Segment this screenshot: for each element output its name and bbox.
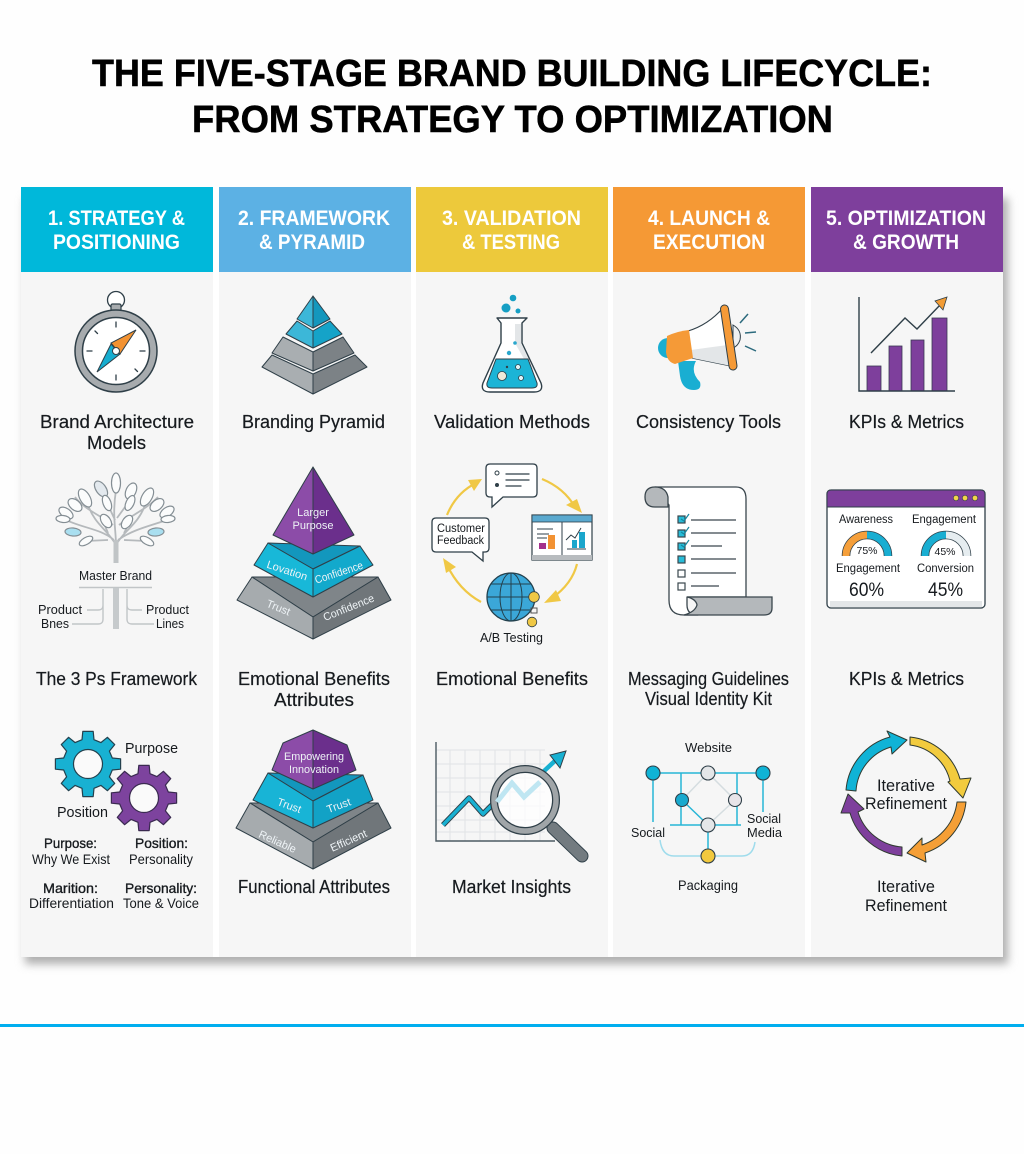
icon: larger purpose pyramid: Confidence — [313, 560, 365, 587]
chart: kpi dashboard: 60% — [849, 580, 884, 601]
icon: brand tree — [38, 473, 189, 631]
icon: gears: Purpose — [125, 741, 178, 757]
header: framework: & PYRAMID — [259, 231, 365, 254]
panel: 3. validation and testing — [416, 187, 608, 957]
icon: brand touchpoint network: Social — [631, 825, 665, 840]
icon: larger purpose pyramid: Purpose — [293, 520, 333, 532]
icon: speech bubble list — [486, 464, 537, 507]
text block: 3 ps definitions: Personality: — [125, 880, 197, 896]
icon: empowering innovation pyramid: Trust — [275, 796, 303, 816]
title — [92, 53, 932, 141]
header: validation: & TESTING — [462, 231, 560, 254]
label: kpis and metrics second: KPIs & Metrics — [849, 669, 964, 689]
icon: growth bar chart — [859, 297, 955, 391]
label: brand architecture models: Models — [87, 433, 146, 453]
header: optimization: & GROWTH — [853, 231, 959, 254]
label: emotional benefits attributes: Emotional Benefits — [238, 669, 390, 689]
icon: brand tree: Bnes — [41, 616, 69, 631]
header: strategy — [21, 187, 213, 272]
icon: guideline scroll — [645, 487, 772, 615]
label: functional attributes: Functional Attributes — [238, 877, 390, 897]
icon: brand tree: Lines — [156, 616, 184, 631]
label: messaging guidelines visual identity kit — [628, 669, 789, 709]
icon: flask — [482, 295, 542, 392]
header: validation — [416, 187, 608, 272]
icon: brand touchpoint network: Website — [685, 740, 732, 755]
icon: brand touchpoint network: Social — [747, 811, 781, 826]
label: a/b testing: A/B Testing — [480, 631, 543, 645]
gauge: engagement — [925, 535, 967, 556]
icon: empowering innovation pyramid: Efficient — [329, 828, 369, 855]
icon: brand tree: Product — [38, 602, 82, 617]
panel: 2. framework and pyramid — [219, 187, 411, 957]
panel: 4. launch and execution — [613, 187, 805, 957]
callout: customer feedback — [432, 518, 489, 561]
label: emotional benefits: Emotional Benefits — [436, 669, 588, 689]
icon: megaphone — [658, 308, 756, 390]
label: market insights: Market Insights — [452, 877, 571, 897]
header: strategy: 1. STRATEGY & — [48, 207, 185, 230]
icon: small branding pyramid — [262, 296, 367, 394]
gauge: awareness — [846, 535, 888, 556]
header: optimization: 5. OPTIMIZATION — [826, 207, 986, 230]
text block: 3 ps definitions: Why We Exist — [32, 851, 110, 867]
header: optimization — [811, 187, 1003, 272]
icon: iterative refinement cycle — [841, 731, 971, 862]
icon: larger purpose pyramid: Lovation — [265, 559, 309, 583]
header: framework — [219, 187, 411, 272]
label: packaging: Packaging — [678, 877, 738, 893]
icon: gears: Position — [57, 805, 108, 821]
label: emotional benefits attributes: Attributes — [274, 690, 354, 710]
icon: brand touchpoint network: Media — [747, 825, 783, 840]
arrows: yellow loop — [443, 479, 582, 603]
icon: compass — [75, 292, 157, 392]
icon: empowering innovation pyramid: Empowering — [284, 751, 344, 763]
header: launch: EXECUTION — [653, 231, 765, 254]
icon: larger purpose pyramid: Larger — [297, 507, 329, 519]
icon: larger purpose pyramid: Trust — [264, 598, 292, 618]
label: branding pyramid: Branding Pyramid — [242, 412, 385, 432]
header: launch: 4. LAUNCH & — [648, 207, 770, 230]
label: messaging guidelines visual identity kit: Visual Identity Kit — [645, 689, 772, 709]
label: iterative refinement — [865, 877, 947, 915]
icon: gears — [55, 731, 178, 831]
text block: 3 ps definitions: Marition: — [43, 880, 98, 896]
chart: kpi dashboard: 45% — [928, 580, 963, 601]
icon: iterative refinement cycle: Iterative — [877, 776, 935, 795]
chart: kpi dashboard: Engagement — [912, 514, 977, 526]
icon: brand tree: Master Brand — [79, 568, 152, 583]
panel: 1. strategy and positioning — [21, 187, 213, 957]
text block: 3 ps definitions: Tone & Voice — [123, 895, 199, 911]
label: emotional benefits attributes — [238, 669, 390, 710]
callout: customer feedback: Customer — [437, 523, 485, 535]
label: brand architecture models — [40, 412, 194, 453]
header: validation: 3. VALIDATION — [442, 207, 581, 230]
text block: 3 ps definitions: Purpose: — [44, 835, 97, 851]
label: kpis and metrics: KPIs & Metrics — [849, 412, 964, 432]
header: framework: 2. FRAMEWORK — [238, 207, 390, 230]
title: FROM STRATEGY TO OPTIMIZATION — [192, 99, 833, 141]
title: THE FIVE-STAGE BRAND BUILDING LIFECYCLE: — [92, 53, 932, 95]
icon: empowering innovation pyramid: Reliable — [257, 829, 298, 856]
icon: brand tree: Product — [146, 602, 189, 617]
header: strategy: POSITIONING — [53, 231, 180, 254]
text block: 3 ps definitions — [29, 835, 199, 911]
icon: analytics window — [532, 515, 592, 560]
chart: kpi dashboard: 75% — [856, 545, 878, 557]
icon: larger purpose pyramid — [237, 467, 391, 639]
header: launch — [613, 187, 805, 272]
icon: larger purpose pyramid: Confidence — [322, 593, 376, 624]
icon: empowering innovation pyramid — [236, 730, 391, 869]
chart: kpi dashboard: Engagement — [836, 563, 901, 575]
label: consistency tools: Consistency Tools — [636, 412, 781, 432]
callout: customer feedback: Feedback — [437, 535, 484, 547]
chart: kpi dashboard: Awareness — [839, 514, 893, 526]
text block: 3 ps definitions: Differentiation — [29, 895, 114, 911]
label: messaging guidelines visual identity kit: Messaging Guidelines — [628, 669, 789, 689]
label: brand architecture models: Brand Architecture — [40, 412, 194, 432]
label: validation methods: Validation Methods — [434, 412, 590, 432]
label: iterative refinement: Refinement — [865, 896, 947, 915]
label: the 3 ps framework: The 3 Ps Framework — [36, 669, 198, 689]
label: iterative refinement: Iterative — [877, 877, 935, 896]
chart: kpi dashboard: 45% — [934, 546, 956, 558]
panel: 5. optimization and growth — [811, 187, 1003, 957]
icon: market chart with magnifier — [436, 742, 582, 856]
icon: empowering innovation pyramid: Innovation — [289, 764, 339, 776]
text block: 3 ps definitions: Personality — [129, 851, 193, 867]
icon: feedback loop — [432, 464, 592, 645]
icon: globe — [487, 573, 539, 627]
chart: kpi dashboard: Conversion — [917, 563, 974, 575]
text block: 3 ps definitions: Position: — [135, 835, 188, 851]
icon: brand touchpoint network — [631, 740, 783, 863]
chart: kpi dashboard — [827, 490, 985, 608]
icon: empowering innovation pyramid: Trust — [325, 796, 353, 816]
icon: iterative refinement cycle: Refinement — [865, 794, 947, 813]
